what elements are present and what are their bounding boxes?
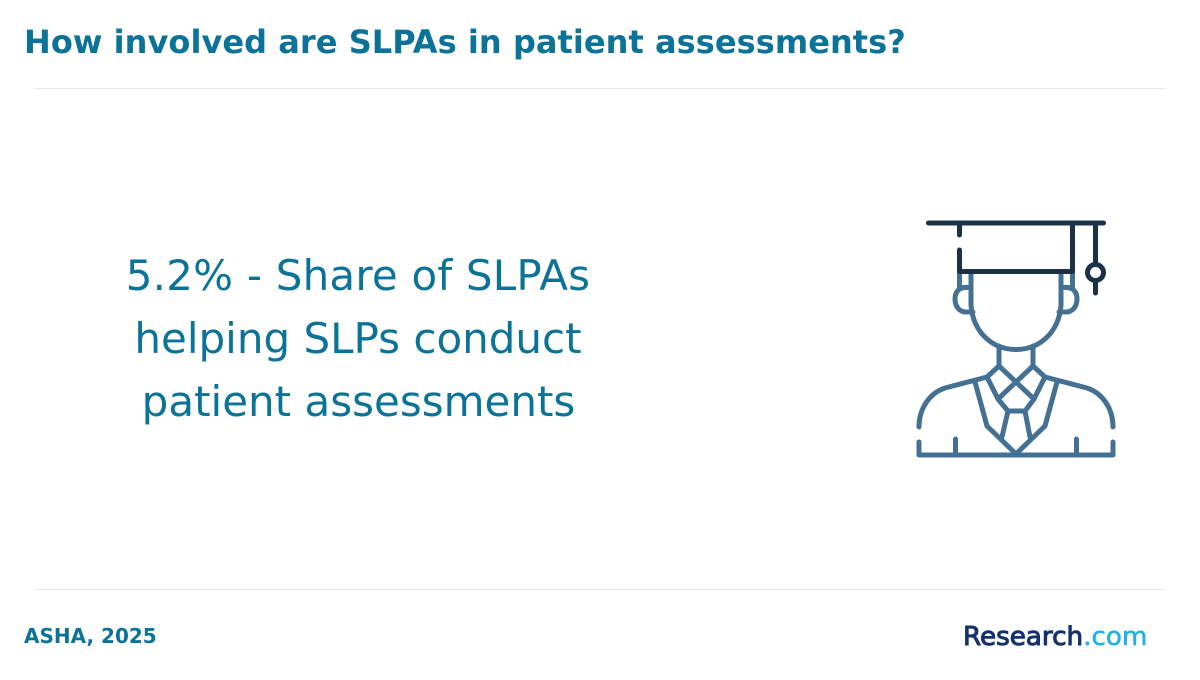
- statistic text: 5.2% - Share of SLPAs: [126, 251, 590, 300]
- statistic text: [126, 251, 590, 426]
- source: ASHA, 2025: [24, 624, 157, 648]
- icon: mortarboard cap: [928, 223, 1104, 293]
- logo: Research.com: Research.com: [963, 622, 1147, 652]
- icon: graduate body: [919, 272, 1113, 455]
- statistic text: helping SLPs conduct: [134, 314, 582, 363]
- statistic text: patient assessments: [142, 377, 575, 426]
- title: How involved are SLPAs in patient assessments?: [24, 23, 906, 61]
